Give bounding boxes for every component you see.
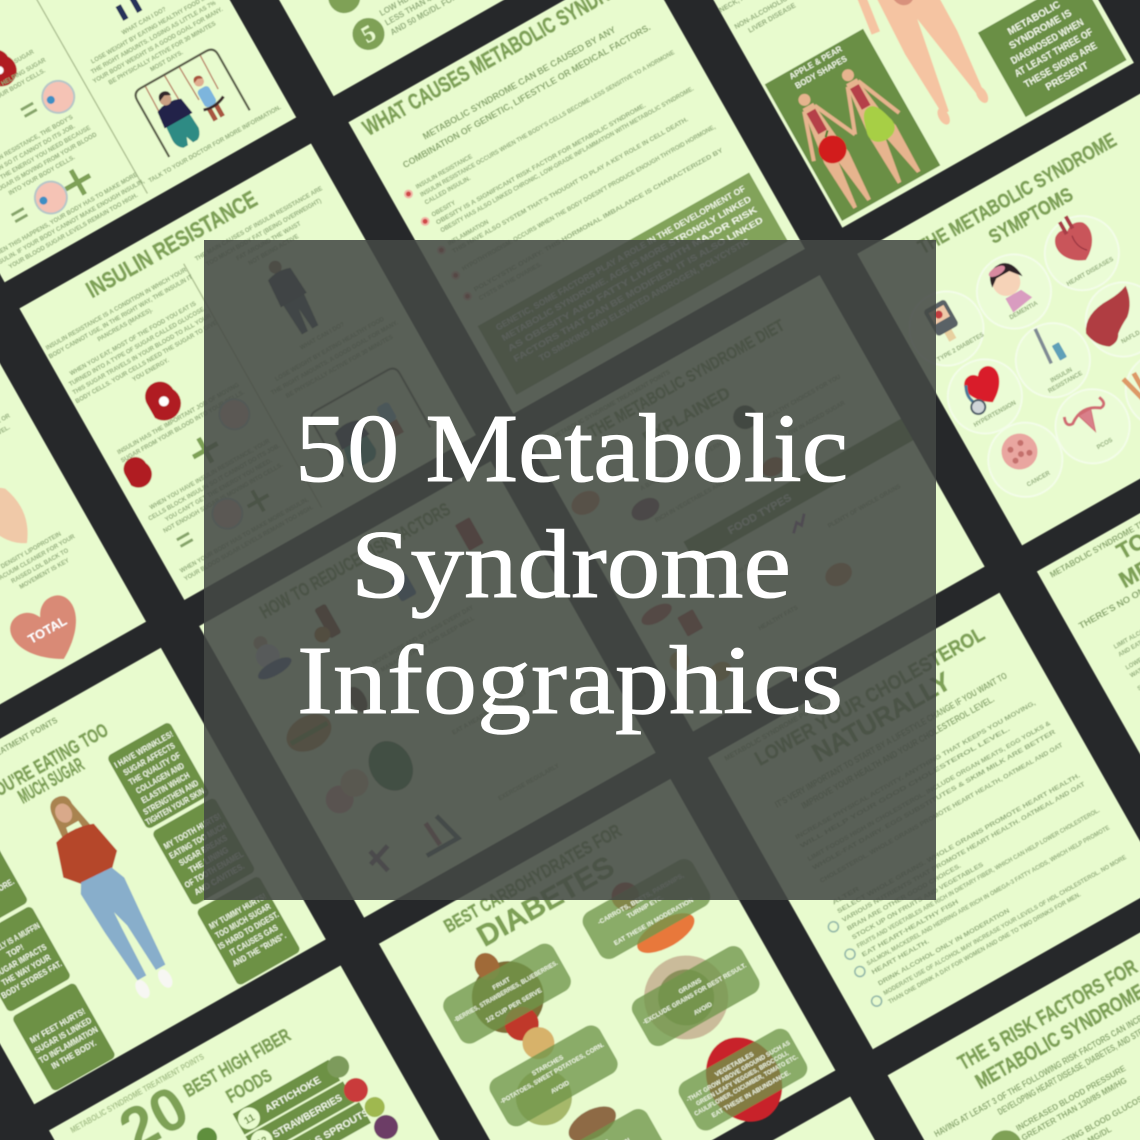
panel: 20 best high fiber foods: FOODS [223,1065,275,1107]
panel: insulin explanation and swing illustration: INTO YOUR BODY CELLS. [8,155,77,197]
icon: cancer cell [995,427,1044,476]
panel: insulin explanation and swing illustration: YOUR BLOOD SUGAR LEVELS REMAIN TOO HIGH. [8,193,140,271]
panel: insulin resistance: WHEN YOU HAVE INSULIN RESISTANCE, YOUR [149,438,272,511]
swing illustration [133,47,250,157]
heading: INSULIN RESISTANCE [82,186,261,303]
cause list: THIS HAVE ALSO SYSTEM THAT'S THOUGHT TO PLAY A KEY ROLE IN CELL DEATH. [452,117,690,255]
panel: too much sugar [0,648,326,1104]
food rows: ARTICHOKE [263,1074,323,1115]
panel: partial card in lower gap [559,1097,1015,1140]
panel: insulin resistance: WHEN YOU EAT, MOST OF THE FOOD YOU EAT IS [69,301,197,377]
panel: insulin resistance: YOUR BLOOD SUGAR LEVELS REMAIN TOO HIGH. [184,505,315,583]
vegetables box: -THAT GROW ABOVE GROUND SUCH AS [685,1039,792,1104]
heart icon: total [4,590,94,676]
panel: lower your cholesterol naturally: IMPROVE YOUR HEALTH AND YOUR CHOLESTEROL LEVEL. [800,694,996,811]
icon: pcos uterus [1063,397,1114,442]
sugar effect boxes: AND CAVITIES. [192,861,246,897]
panel: insulin resistance: THE RIGHT AMOUNTS. A GOOD GOAL FOR MANY. [270,320,400,397]
food photos [193,1044,402,1140]
apple and pear box: APPLE & PEAR [788,44,844,81]
sugar molecule icon [140,375,187,426]
panel: metabolic syndrome symptoms: PCOS [1096,438,1114,451]
cause list: OBESITY HAS ALSO LINKED CHRONIC, LOW-GRADE INFLAMMATION WITH METABOLIC SYNDROME. [440,86,695,234]
sugar effect boxes: IT CAUSES GAS [228,922,280,958]
panel: insulin explanation and swing illustration: THE RIGHT AMOUNTS. LOSING AS LITTLE AS 7% [90,0,218,76]
cause list [403,42,734,309]
panel: metabolic syndrome diet explained: LOW IN ADDED SUGAR [785,400,847,439]
callout box: FACTORS THAT CAN BE MODIFIED. IT IS ALSO LINKED [512,215,765,364]
fruit box: 1/2 CUP PER SERVE [485,987,544,1024]
cause list: CYSTS IN THE OVARIES. [478,262,543,302]
panel: insulin resistance: INSULIN RESISTANCE IS A CONDITION IN WHICH YOUR [45,267,189,352]
sugar effect boxes [0,720,302,1092]
vegetables box: EAT THESE IN ABUNDANCE. [711,1069,792,1120]
panel: insulin resistance: FAT AROUND THE WAIST [236,221,303,262]
starches box: STARCHES [531,1054,566,1078]
sugar effect boxes: SUGAR IS LINKED [33,1015,93,1055]
sugar effect boxes: OF TOOTH ENAMEL [183,849,245,890]
panel: how to reduce risk factors: EAT A HEART-HEALTHY DIET [452,690,528,737]
sugar effect boxes: MY TOOTH HURTS! [162,811,223,851]
grains box [628,942,764,1050]
person standing [259,254,324,337]
panel: what causes metabolic syndrome: METABOLIC SYNDROME CAN BE CAUSED BY ANY [421,25,617,142]
panel: insulin resistance: TOO MUCH BODY FAT (BEING OVERWEIGHT) [205,198,323,268]
root vegetables box: EAT THESE IN MODERATION [613,897,695,947]
diagnosis box: DIAGNOSED WHEN [1009,17,1086,67]
sugar effect boxes: THE LINING [187,844,230,875]
swing illustration [308,366,430,477]
apple and pear box: BODY SHAPES [794,54,849,91]
cause list: POLYCYSTIC OVARY: THIS HORMONAL IMBALANCE IS CHARACTERIZED BY [473,148,724,294]
panel: cholesterol total card with heart: RAISED LDL BACK TO [11,548,70,585]
heading: THE METABOLIC SYNDROME DIET [585,315,788,442]
icon: type 2 diabetes meter [923,299,964,346]
sugar molecule icon [0,44,22,91]
panel: metabolic syndrome diet explained: RICH IN VEGETABLES AND FRUIT [654,471,743,524]
icon: hypertension heart [956,362,1011,417]
advice list: LIMIT FOODS HIGH IN CHOLESTEROL, INCLUDE ORGAN MEATS, EGG YOLKS & [807,721,1053,863]
panel: metabolic syndrome diet explained: HEALTHY CHOICES FOR YOU [764,374,842,422]
cause list: OBESITY IS A SIGNIFICANT RISK FACTOR FOR METABOLIC SYNDROME. [435,103,648,227]
starches box: AVOID [550,1080,571,1096]
panel: 20 best high fiber foods: METABOLIC SYNDROME TREATMENT POINTS [69,1052,206,1135]
cause list: HYPOTHYROIDISM: OCCURS WHEN THE BODY DOESN'T PRODUCE ENOUGH THYROID HORMONE, [462,124,717,273]
panel: insulin resistance: CELLS BLOCK INSULIN SO IT CANNOT DO ITS JOB. [148,443,282,523]
grains box: -EXCLUDE GRAINS FOR BEST RESULT. [642,962,748,1026]
panel: insulin resistance: SUGAR FROM YOUR BLOOD INTO YOUR CELLS. [120,390,246,465]
panel: lower your cholesterol naturally: METABOLIC SYNDROME POINTS [724,702,824,763]
starches box [485,1021,622,1130]
advice list: ALTER [832,886,862,907]
panel: cholesterol total card with heart: MOVEMENT IS KEY [19,558,71,591]
fruit box: FRUIT [492,976,512,992]
vegetables box: CAULIFLOWER, CUCUMBER, TOMATO ETC. [693,1054,800,1118]
advice list: EAT HEART-HEALTHY FISH [861,899,960,959]
advice list: DRINK ALCOHOL ONLY IN MODERATION [877,908,1011,987]
panel: apple and pear body shapes: LIVER DISEASE [747,2,797,35]
diagnosis box: THESE SIGNS ARE [1022,41,1099,91]
grains box: AVOID [693,1001,714,1017]
badge: risk one [984,1124,1028,1140]
panel: cholesterol total card with heart: DENSITY LIPOPROTEIN [0,532,63,570]
sugar effect boxes: I HAVE WRINKLES! [112,729,175,770]
panel: metabolic syndrome symptoms: TYPE 2 DIABETES [937,332,985,364]
panel: insulin resistance: LOSE WEIGHT BY EATING HEALTHY FOOD [275,316,386,383]
title: Syndrome [351,511,791,618]
title [295,395,848,734]
sugar effect boxes: TO INFLAMMATION [37,1024,100,1065]
callout box [478,173,788,395]
panel: insulin resistance: NOT ENOUGH SUGAR IS MOVING INTO CELLS. [163,462,285,535]
panel: insulin explanation and swing illustration: BE PHYSICALLY ACTIVE FOR 30 MINUTES [108,21,217,87]
panel: apple and pear body shapes [677,0,1134,228]
panel: how to reduce risk factors: MANAGE STRESS AND SLEEP WELL [380,616,476,674]
heart icon: total: TOTAL [25,613,69,647]
diagnosis box [978,0,1127,117]
food photos [443,854,797,1140]
heading: BEST HIGH FIBER [180,1025,294,1101]
sugar effect boxes: TOP! [5,942,26,960]
advice list: MODERATE USE OF ALCOHOL MAY INCREASE YOUR LEVELS OF HDL CHOLESTEROL. NO MORE [883,855,1128,997]
diagnosis box: PRESENT [1044,61,1091,93]
panel: what causes metabolic syndrome: COMBINATION OF GENETIC, LIFESTYLE OR MEDICAL FACTORS. [401,22,652,170]
panel: insulin explanation and swing illustration: YOUR BODY WEIGHT IS A GOOD GOAL FOR MANY. [92,7,225,85]
fruit box: -BERRIES, STRAWBERRIES, BLUEBERRIES. [453,960,559,1024]
icons: heart check bullets [827,919,883,1008]
panel: insulin resistance: THIS SUGAR TRAVELS IN YOUR BLOOD TO ALL YOUR [72,313,213,396]
panel: metabolic syndrome symptoms: HEART DISEASES [1066,257,1115,288]
sugar effect boxes: ELASTIN WHICH [139,770,191,805]
vegetables box: VEGETABLES [714,1051,756,1079]
food rows: STRAWBERRIES [271,1092,344,1140]
sugar effect boxes: IN THE BODY. [50,1038,98,1071]
panel: metabolic syndrome diet explained [528,275,985,732]
panel: lower your cholesterol naturally [708,593,1140,1049]
panel: insulin resistance: TURNED INTO A TYPE OF SUGAR CALLED GLUCOSE. [68,306,208,388]
panel: metabolic syndrome symptoms: SYMPTOMS [985,184,1077,249]
advice list: VARIOUS NUTRIENTS THAT PROMOTE HEART HEALTH. OATMEAL AND OAT [842,782,1087,924]
fruit box [439,940,575,1048]
sugar effect boxes: SUGAR AFFECTS [121,740,177,778]
panel: insulin resistance: BE PHYSICALLY ACTIVE FOR 30 MINUTES [285,335,395,400]
panel: metabolic syndrome diet explained: LEAN PROTEIN [728,553,770,580]
diagnosis box: AT LEAST THREE OF [1013,27,1095,80]
panel: metabolic syndrome symptoms: HYPERTENSION [973,400,1017,429]
root vegetables box: TURNIP ETC. [626,894,665,920]
icon: insulin syringe [1033,322,1067,365]
cause list: INSULIN RESISTANCE [415,154,474,191]
panel: metabolic syndrome diet explained: METABOLIC SYNDROME TREATMENT POINTS [552,370,672,441]
diagnosis box: SYNDROME IS [1007,8,1074,52]
panel: 20 best high fiber foods [49,965,506,1140]
food icons [567,395,868,703]
food types band: FOOD TYPES [726,492,794,537]
figure: pear body [825,57,929,190]
advice list: CHOLESTEROL. WHOLE GRAINS PROMOTE HEART HEALTH, OATMEAL AND OAT [819,742,1065,885]
panel: how to reduce risk factors: MOVE MORE AND SIT LESS EVERY DAY [371,605,475,667]
panel: insulin resistance: THE MAIN CAUSES OF INSULIN RESISTANCE ARE [194,186,324,263]
diagnosis box: METABOLIC [1006,0,1063,38]
food types band [683,419,913,563]
sugar effect boxes: EATING TOO MUCH [167,821,228,861]
food rows: 11 [242,1112,257,1127]
panel: metabolic syndrome symptoms [857,89,1140,545]
advice list: INCREASE PHYSICAL ACTIVITY. ANYTHING THAT KEEPS YOU MOVING, [795,700,1037,841]
panel: metabolic syndrome diet explained: EXPLAINED [639,383,734,448]
panel: insulin resistance: YOU ENERGY. [132,358,171,383]
panel: insulin resistance: NOT BEING ACTIVE [248,234,300,267]
vegetables box [675,1025,811,1135]
panel: insulin resistance [19,143,476,600]
starches box: -POTATOES, SWEET POTATOES, CORN. [499,1042,606,1106]
sugar effect boxes: THE QUALITY OF [127,750,182,787]
icon: heart disease [1045,209,1102,270]
lifestyle icons [234,517,604,888]
sugar effect boxes: THE WAY YOUR [0,952,52,988]
panel: insulin explanation and swing illustration [0,0,296,283]
legumes box [533,1105,669,1140]
heading: BEST CARBOHYDRATES FOR [441,821,625,937]
panel: insulin resistance: YOU CAN'T GET THE ENERGY YOU NEED. [165,458,274,523]
sugar effect boxes: MY FEET HURTS! [28,1006,87,1045]
legs of person at top [115,0,142,21]
panel: insulin resistance: WHAT CAN I DO? [299,322,346,352]
root vegetables box: -CARROTS, BEETS, PARSNIPS, [597,872,685,927]
tips list [1113,605,1140,693]
translucent dark title overlay [204,240,936,900]
apple and pear box [765,29,940,221]
icon: dementia girl [984,257,1036,316]
panel: insulin resistance: BODY CANNOT USE, IN THE RIGHT WAY, THE INSULIN IT [48,274,194,361]
panel: metabolic syndrome symptoms: INSULIN [1050,367,1074,384]
cause list: INSULIN RESISTANCE OCCURS WHEN THE BODY'S CELLS BECOME LESS SENSITIVE TO A HORMONE [420,50,676,199]
panel: metabolic syndrome diet explained: HEALTHY FATS [758,605,799,632]
panel: lower your cholesterol naturally: IT'S VERY IMPORTANT TO START BY A LIFESTYLE CHANGE IF YOU WANT TO [773,671,1009,810]
cell icon [36,75,80,119]
panel: best carbohydrates for diabetes [379,779,839,1140]
panel: insulin resistance: INSULIN HAS THE IMPORTANT JOB OF MOVING [117,382,241,456]
heading: LOWER YOUR CHOLESTEROL [751,623,989,771]
callout box: TO SMOKING AND ELEVATED ANDROGEN, POLYCYSTIC [537,236,751,363]
panel: metabolic syndrome diet explained: A BALANCED EATING PATTERN [640,442,723,492]
cell plus equation [5,161,98,233]
root vegetables box [579,855,714,963]
advice list: BRAN ARE OTHER GOOD CHOICES. [846,863,963,933]
advice list: WHOLE-FAT DAIRY. EGG SUBSTITUTES & SKIM MILK ARE BETTER [812,729,1058,872]
sugar effect boxes: SUGAR BREAKS [177,832,229,868]
advice list: FRUITS AND VEGETABLES ARE RICH IN DIETARY FIBER, WHICH CAN HELP LOWER CHOLESTEROL. [856,808,1101,950]
panel: lower your cholesterol naturally: NATURALLY [807,666,956,768]
panel: insulin explanation and swing illustration: = [14,92,43,127]
panel: metabolic syndrome diet explained: PLENTY OF WHOLE GRAINS [827,484,902,530]
panel: how to reduce risk factors: EXERCISE REGULARLY [498,763,561,802]
panel: the 5 risk factors for metabolic syndrome: INCREASED BLOOD PRESSURE [1015,1064,1128,1133]
callout box: GENETIC, SOME FACTORS PLAY A ROLE IN THE DEVELOPMENT OF [494,183,747,332]
advice list [795,699,1134,1006]
sugar effect boxes: IS HARD TO DIGEST. [216,909,280,951]
number five badge [347,12,390,56]
panel: what causes metabolic syndrome [348,0,805,414]
sugar effect boxes: MY TUMMY HURTS! [207,891,268,931]
advice list: STOCK UP ON FRUITS AND VEGETABLES [851,862,985,941]
panel: metabolic syndrome symptoms: RESISTANCE [1048,371,1084,395]
skin coloured blob [0,480,38,558]
sugar effect boxes: AND THE "RUNS". [231,930,288,969]
panel: how to reduce risk factors [199,461,656,918]
title: 50 Metabolic [295,395,848,502]
advice list: WILL HELP YOUR GOOD CHOLESTEROL LEVEL. [800,726,1012,850]
sugar effect boxes: TIGHTEN YOUR SKIN. [144,785,208,827]
sugar effect boxes: TOO MUCH SUGAR [213,901,272,940]
advice list: SALMON, MACKEREL AND HERRING ARE RICH IN OMEGA-3 FATTY ACIDS, WHICH HELP PROMOTE [866,825,1111,967]
panel: insulin resistance: = [170,522,199,557]
callout box: AS OBESITY AND FATTY LIVER WITH MAJOR RISK [506,204,760,353]
sugar effect boxes: BODY STORES FAT. [0,958,63,1001]
number five badge: 5 [357,21,381,49]
panel: insulin explanation and swing illustration: SUGAR [14,49,36,65]
advice list: THAN ONE DRINK A DAY FOR WOMEN AND ONE TO TWO DRINKS FOR MEN. [888,892,1083,1006]
cause list: INFLAMMATION [447,220,490,247]
woman figure [27,784,188,1006]
sugar effect boxes: COLLAGEN AND [134,760,186,796]
panel: risk list card with numbered circles [169,0,625,96]
heading: HOW TO REDUCE RISK FACTORS [257,499,454,622]
panel: insulin resistance: WHEN YOUR BODY HAS TO MAKE MORE INSULIN, [179,497,310,575]
callout box: METABOLIC SYNDROME. AGE IS MORE STRONGLY LINKED [500,194,753,343]
cause list: CALLED INSULIN. [424,176,472,206]
panel: metabolic syndrome symptoms: DEMENTIA [1009,300,1040,321]
panel: cholesterol total card with heart [0,330,146,787]
advice list: SELECT WHOLE GRAINS. WHOLE GRAINS PROMOTE HEART HEALTH. [837,773,1082,915]
panel: insulin explanation and swing illustration: TALK TO YOUR DOCTOR FOR MORE INFORMATION. [148,105,283,185]
panel: insulin resistance: PANCREAS (MAKES). [97,307,154,343]
icon: liver [1075,286,1140,354]
grains box: GRAINS [678,977,704,996]
food rows [233,1055,374,1140]
large body figure [786,0,1012,133]
icon: other symptom [1123,373,1140,405]
panel: metabolic syndrome symptoms: CANCER [1026,470,1052,489]
advice list: HEART HEALTH. [871,939,931,976]
title: Infographics [297,627,843,734]
panel: too much sugar: MUCH SUGAR [15,755,88,808]
figure: apple body [782,81,887,214]
panel: insulin resistance: BODY CELLS. YOUR CELLS NEED THE SUGAR TO GIVE [75,320,219,405]
cell plus equation: = [5,197,34,232]
panel: insulin explanation and swing illustration: MOST DAYS. [150,50,185,73]
cause list: OBESITY [431,200,457,219]
panel: insulin explanation and swing illustration: WHAT CAN I DO? [121,7,168,37]
panel: best carbohydrates for diabetes: DIABETES [472,850,620,953]
vegetables box: GREEN LEAFY VEGGIES, BROCCOLI, [695,1050,790,1108]
sugar effect boxes: STRENGTHEN AND [141,778,200,817]
panel: medication tips [1037,407,1140,863]
